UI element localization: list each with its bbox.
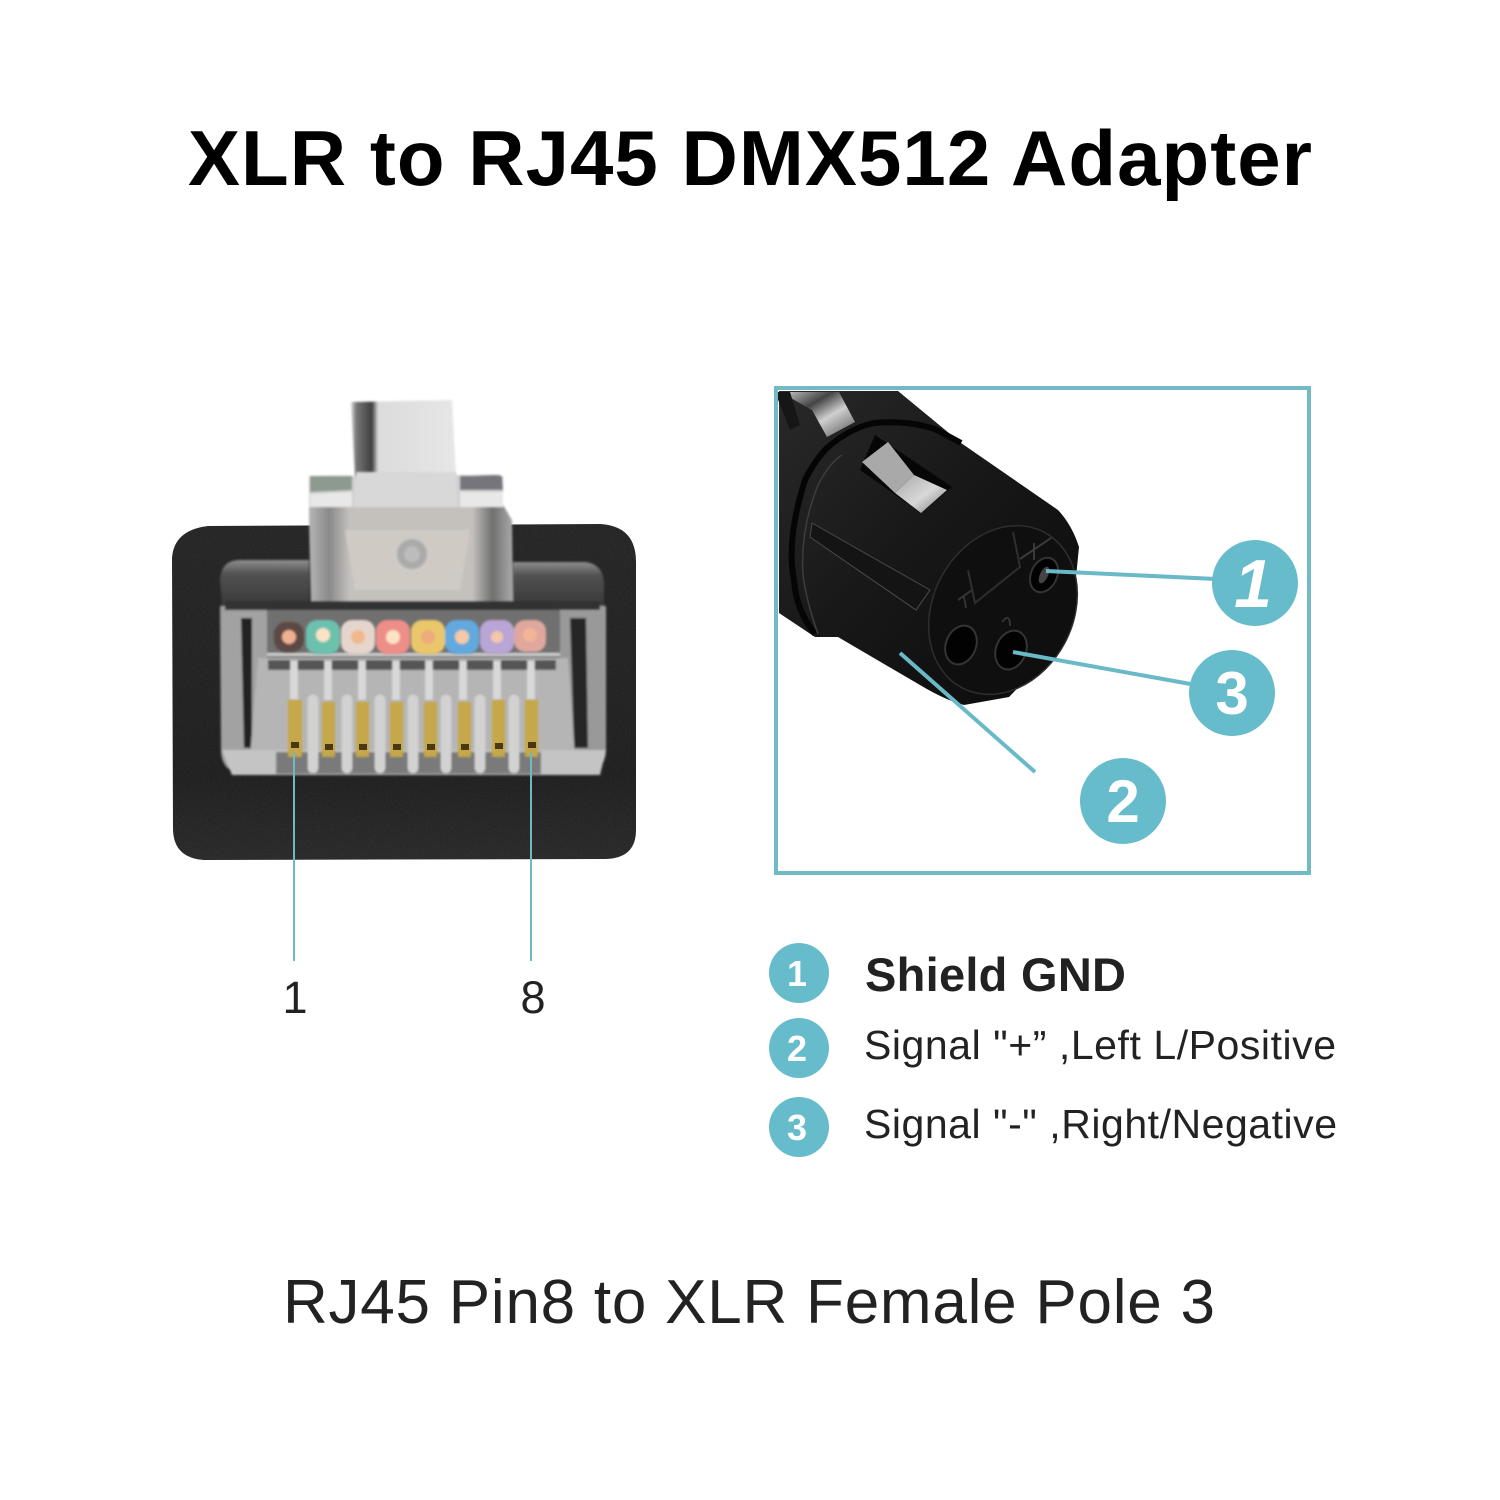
title: XLR to RJ45 DMX512 Adapter bbox=[188, 114, 1312, 202]
RJ45 connector photo bbox=[172, 400, 636, 860]
callout line 2 bbox=[900, 653, 1035, 772]
legend item 2: 2 bbox=[787, 1028, 807, 1069]
callout line 1 bbox=[1046, 571, 1216, 579]
legend item 2 bbox=[769, 1018, 1336, 1078]
metal latch window bbox=[860, 435, 952, 513]
pin 1 label: 1 bbox=[282, 972, 308, 1023]
contact pins: coloured wire ends bbox=[274, 620, 546, 654]
legend item 1: Shield GND bbox=[865, 948, 1126, 1001]
callout badge 3: 3 bbox=[1215, 660, 1249, 727]
contact holes bbox=[1025, 553, 1063, 597]
XLR connector photo bbox=[775, 391, 1106, 721]
callout badge 1 bbox=[1212, 540, 1298, 626]
legend item 3: Signal "-" ,Right/Negative bbox=[864, 1101, 1337, 1147]
caption: RJ45 Pin8 to XLR Female Pole 3 bbox=[283, 1268, 1215, 1337]
top latch metal bbox=[780, 392, 855, 437]
legend item 2: Signal "+” ,Left L/Positive bbox=[864, 1022, 1336, 1068]
collar ring bbox=[792, 422, 961, 634]
face markings bbox=[968, 532, 1020, 603]
pin 8 leader line bbox=[530, 752, 532, 961]
contact pins: gold blades bbox=[288, 700, 538, 757]
barrel groove bbox=[810, 523, 930, 610]
legend item 3: 3 bbox=[787, 1107, 807, 1148]
release tab bbox=[351, 400, 456, 478]
contact pins: clear channels bbox=[294, 660, 531, 768]
callout line 3 bbox=[1013, 652, 1196, 685]
pin 1 leader line bbox=[293, 752, 295, 961]
callout badge 2: 2 bbox=[1106, 768, 1140, 835]
panel: XLR connector bbox=[775, 388, 1309, 873]
legend item 3 bbox=[769, 1097, 1337, 1157]
connector face bbox=[900, 499, 1106, 721]
black housing bbox=[172, 524, 636, 860]
legend bbox=[769, 943, 1337, 1157]
legend item 1: 1 bbox=[787, 953, 807, 994]
legend item 1 bbox=[769, 943, 1126, 1003]
latch and clear plug body bbox=[220, 472, 606, 775]
callout badge 3 bbox=[1189, 650, 1275, 736]
callout badge 1: 1 bbox=[1234, 546, 1272, 622]
panel frame bbox=[776, 388, 1309, 873]
infographic canvas bbox=[172, 128, 1336, 1324]
callout badge 2 bbox=[1080, 758, 1166, 844]
pin 8 label: 8 bbox=[520, 972, 546, 1023]
